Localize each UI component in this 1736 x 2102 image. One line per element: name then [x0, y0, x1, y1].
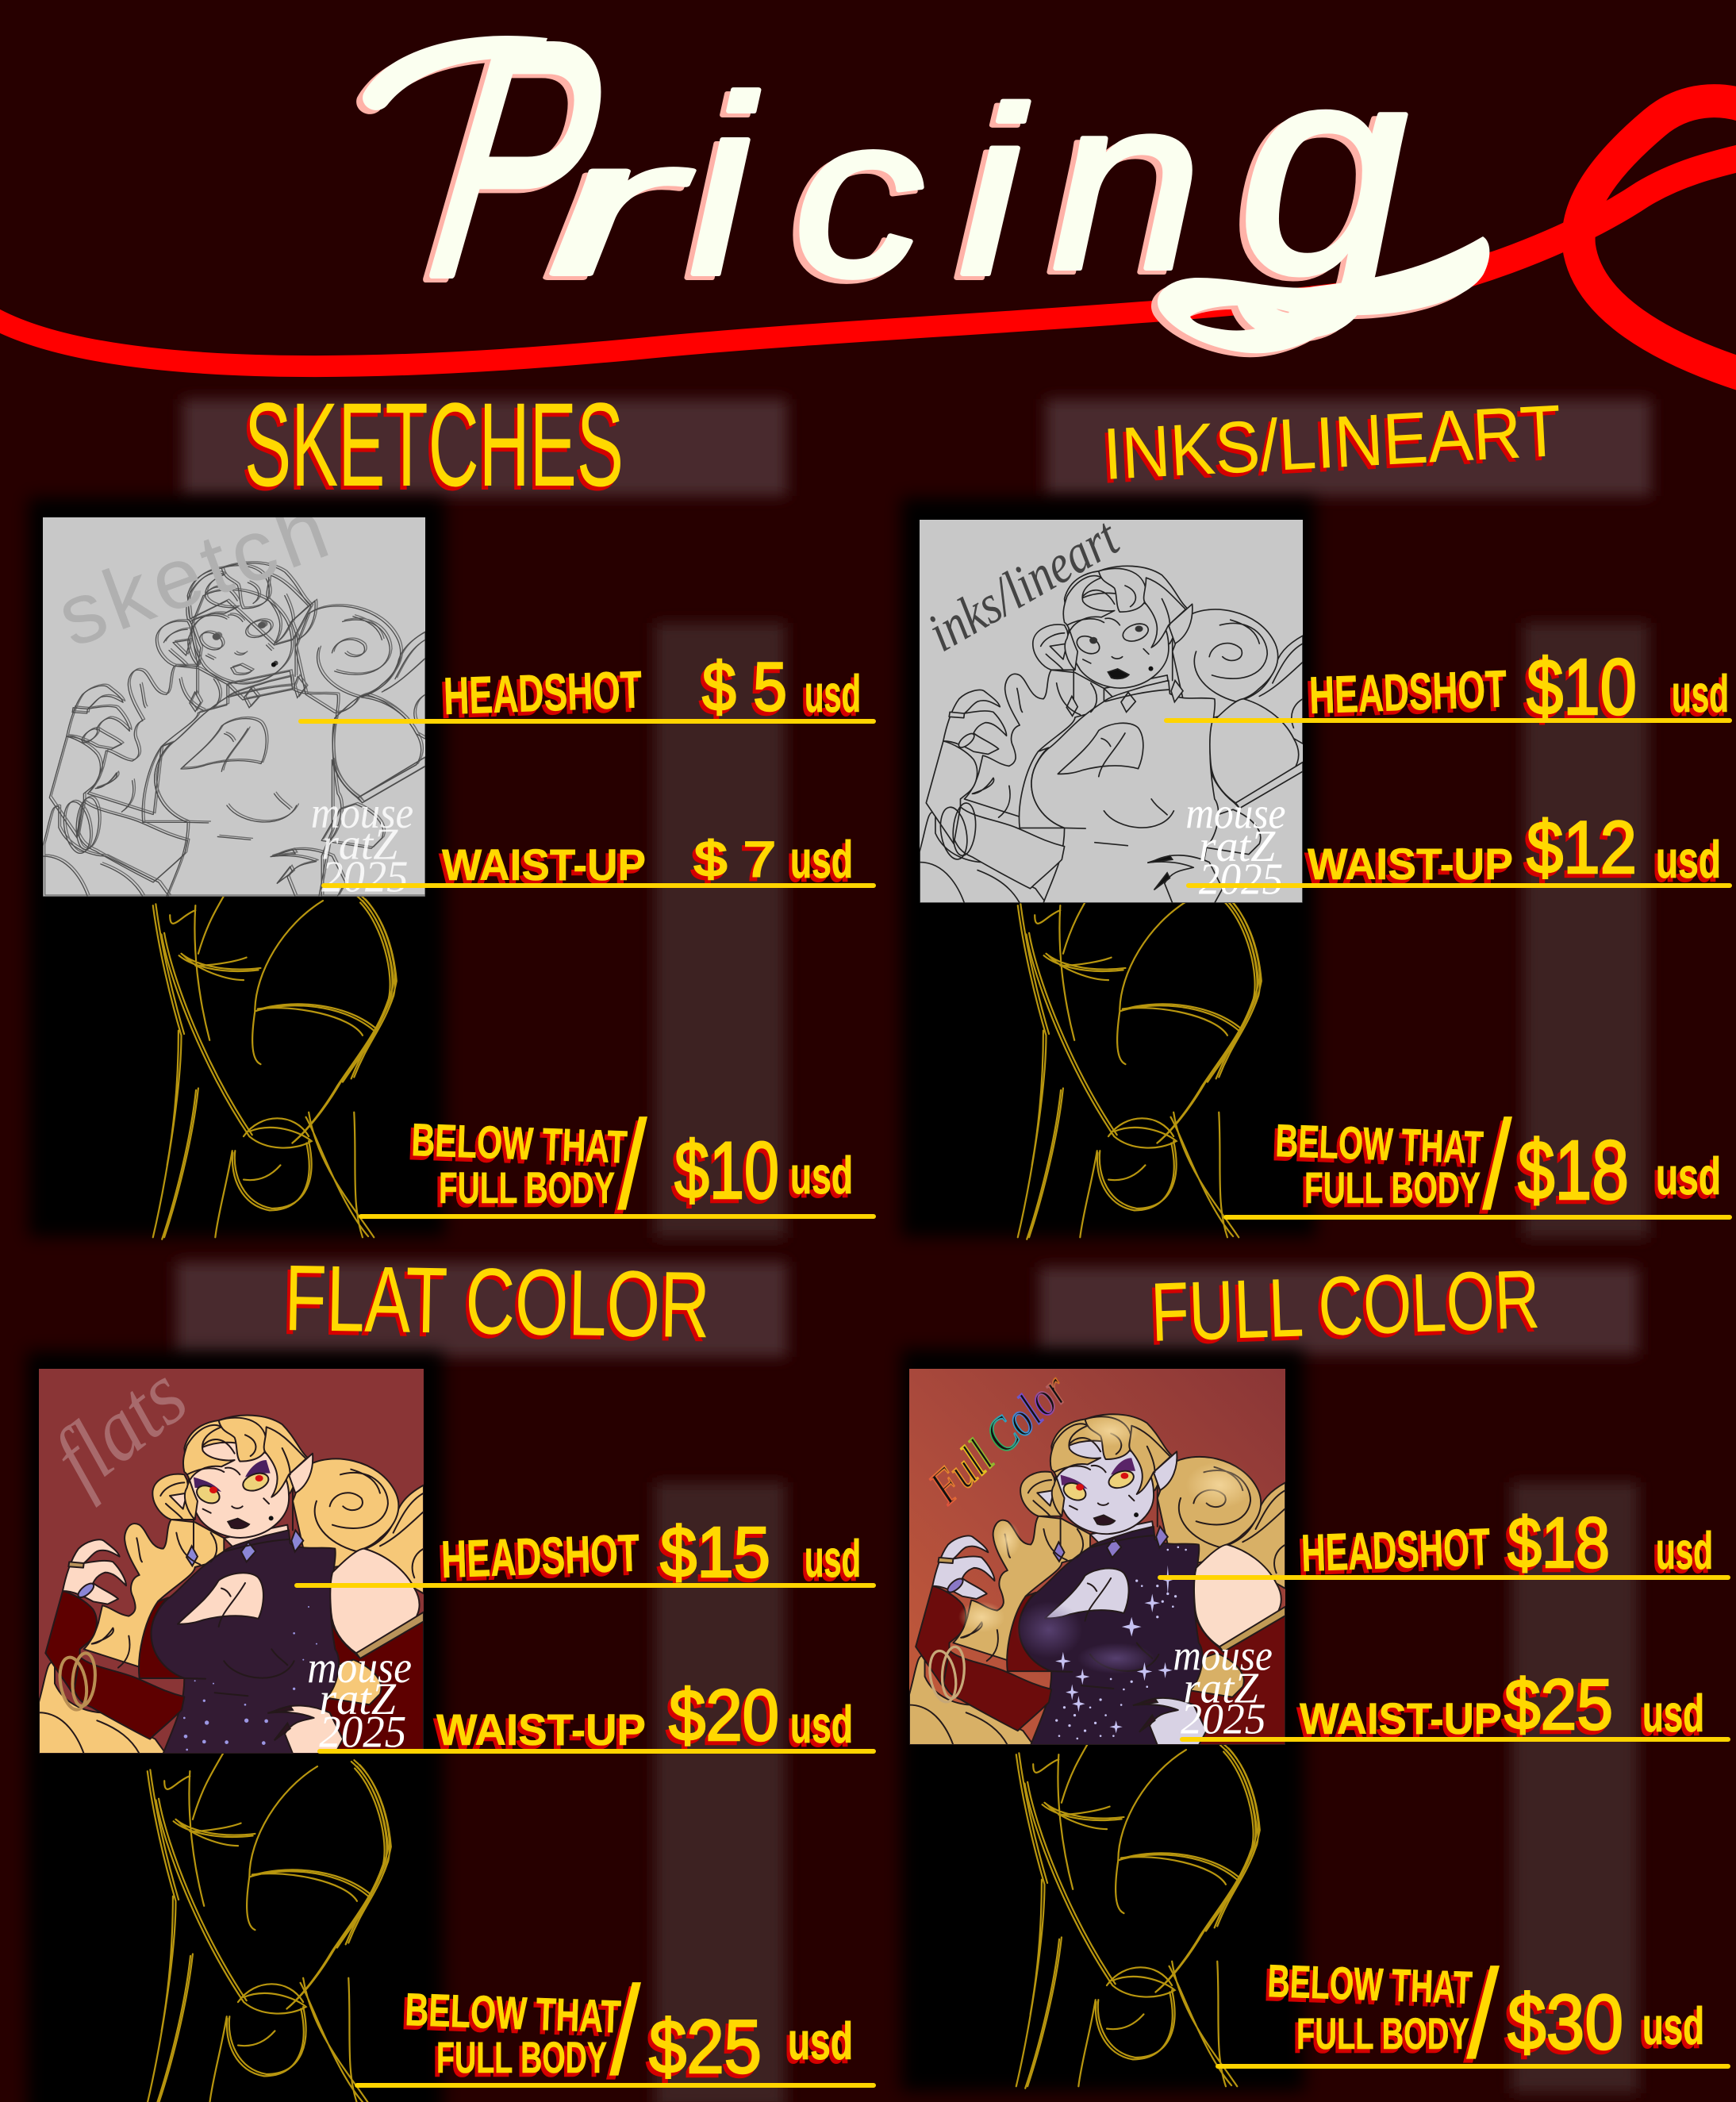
illustration: full color example: ratZ [1183, 1663, 1259, 1712]
row: headshot $5: usd [805, 664, 861, 723]
row: below that / full body $30: usd [1642, 1996, 1704, 2055]
illustration: flat color example [34, 1345, 424, 1758]
heading: INKS/LINEART: INKS/LINEART [1101, 390, 1563, 495]
row: waist-up $12 [1308, 805, 1721, 889]
row: below that / full body $25: / [609, 1959, 641, 2101]
illustration: inks example: 2025 [1199, 855, 1283, 904]
black backing panel: flat color [27, 1351, 444, 2102]
price column band: inks and lineart [1523, 623, 1649, 1238]
illustration: full color example: Full Color [919, 1363, 1079, 1515]
row: waist-up $20 [436, 1675, 853, 1756]
illustration: inks example: ratZ [1199, 822, 1276, 871]
illustration: inks example: mouse [1185, 789, 1285, 838]
row: waist-up $12: $12 [1527, 805, 1637, 889]
illustration: flat color example: ratZ [319, 1675, 396, 1724]
black backing panel: sketches [29, 498, 445, 1237]
black backing panel: full color [901, 1349, 1304, 2092]
price rows: sketches [411, 649, 861, 1235]
sketch reference lines under full color image [1016, 1735, 1260, 2089]
row: below that / full body $10: FULL BODY [439, 1162, 615, 1212]
price rows: flat color [405, 1513, 861, 2101]
illustration: flat color example: mouse [307, 1643, 412, 1693]
row: below that / full body $10: $10 [674, 1125, 779, 1216]
row: headshot $10: HEADSHOT [1308, 659, 1507, 724]
heading: FLAT COLOR: FLAT COLOR [284, 1246, 711, 1358]
row: waist-up $7 [442, 830, 853, 890]
row: headshot $18: $18 [1507, 1504, 1610, 1583]
title: Pricing: i [689, 44, 760, 328]
illustration: flat color example: 2025 [319, 1708, 406, 1758]
heading panel: inks and lineart [1046, 399, 1651, 496]
heading: SKETCHES: SKETCHES [244, 378, 624, 511]
title: Pricing: g [1238, 1, 1410, 340]
row: waist-up $20: usd [790, 1695, 853, 1754]
title: Pricing: i [958, 58, 1030, 325]
row: headshot $10 [1308, 643, 1729, 732]
row: waist-up $7: $ 7 [694, 832, 776, 887]
row: headshot $5: HEADSHOT [443, 659, 643, 725]
row: below that / full body $18: $18 [1518, 1124, 1629, 1217]
row: headshot $15: usd [805, 1529, 861, 1588]
row: waist-up $25: usd [1642, 1684, 1704, 1743]
heading panel: sketches [182, 399, 787, 496]
row: headshot $15 [440, 1513, 861, 1593]
sketch reference lines under inks image [1018, 886, 1262, 1239]
divider rules under price rows [297, 721, 1730, 2085]
illustration: sketch example: sketch [45, 480, 340, 666]
sketch reference lines under sketches image [153, 886, 397, 1239]
row: waist-up $20: $20 [669, 1675, 779, 1756]
row: headshot $5 [443, 649, 861, 725]
row: headshot $18: HEADSHOT [1300, 1517, 1491, 1582]
row: below that / full body $30: FULL BODY [1296, 2008, 1469, 2058]
row: below that / full body $10: usd [790, 1146, 853, 1205]
illustration: sketch example: mouse [311, 789, 413, 838]
title: Pricing: r [547, 98, 692, 315]
heading panel: full color [1039, 1267, 1638, 1355]
row: waist-up $12: WAIST-UP [1308, 839, 1513, 889]
row: below that / full body $25: usd [788, 2012, 853, 2070]
row: headshot $15: $15 [660, 1513, 770, 1593]
title: Pricing [363, 0, 1489, 353]
row: below that / full body $18: BELOW THAT [1275, 1115, 1484, 1174]
row: waist-up $7: usd [790, 830, 853, 889]
title: Pricing: n [1051, 45, 1202, 321]
row: below that / full body $30: $30 [1507, 1978, 1623, 2065]
row: headshot $15: HEADSHOT [440, 1523, 640, 1589]
illustration: flat color example: flats [34, 1345, 205, 1508]
heading panel: flat color [176, 1262, 787, 1357]
row: below that / full body $10: BELOW THAT [411, 1114, 628, 1173]
illustration: full color example: mouse [1173, 1631, 1273, 1680]
row: below that / full body $18: FULL BODY [1304, 1162, 1481, 1212]
row: below that / full body $30: BELOW THAT [1267, 1955, 1473, 2014]
row: waist-up $7: WAIST-UP [442, 840, 646, 890]
illustration: inks example [918, 506, 1303, 904]
illustration: sketch example: 2025 [321, 853, 409, 901]
row: headshot $5: $ 5 [702, 649, 787, 725]
red ribbon behind title [0, 101, 1736, 379]
price rows: full color [1267, 1504, 1713, 2085]
illustration: inks example: inks/lineart [918, 506, 1130, 664]
row: below that / full body $25: BELOW THAT [405, 1984, 622, 2042]
row: below that / full body $25: FULL BODY [436, 2032, 607, 2082]
row: below that / full body $30: / [1466, 1943, 1500, 2085]
row: below that / full body $30 [1267, 1943, 1704, 2085]
row: below that / full body $10: / [617, 1093, 647, 1235]
row: waist-up $25: $25 [1504, 1666, 1613, 1745]
heading: FULL COLOR: FULL COLOR [1150, 1253, 1542, 1359]
row: headshot $18 [1300, 1504, 1713, 1583]
price column band: full color [1511, 1482, 1638, 2093]
row: below that / full body $18: / [1482, 1093, 1512, 1235]
row: below that / full body $25: $25 [649, 2004, 762, 2089]
illustration: sketch example [43, 517, 425, 897]
row: waist-up $25: WAIST-UP [1300, 1693, 1502, 1743]
illustration: full color example: 2025 [1181, 1694, 1266, 1743]
illustration: full color example [909, 1363, 1285, 1745]
price column band: sketches [655, 623, 785, 1238]
row: waist-up $20: WAIST-UP [436, 1704, 646, 1754]
row: below that / full body $25 [405, 1959, 853, 2101]
row: headshot $10: $10 [1527, 643, 1637, 732]
row: below that / full body $18 [1275, 1093, 1721, 1235]
row: below that / full body $10 [411, 1093, 853, 1235]
price rows: inks and lineart [1275, 643, 1729, 1235]
row: waist-up $25 [1300, 1666, 1704, 1745]
sketch reference lines under flat image [148, 1752, 391, 2102]
price column band: flat color [655, 1482, 785, 2102]
illustration: sketch example: ratZ [321, 820, 398, 869]
black backing panel: inks and lineart [901, 498, 1315, 1237]
title: Pricing: c [793, 67, 924, 325]
